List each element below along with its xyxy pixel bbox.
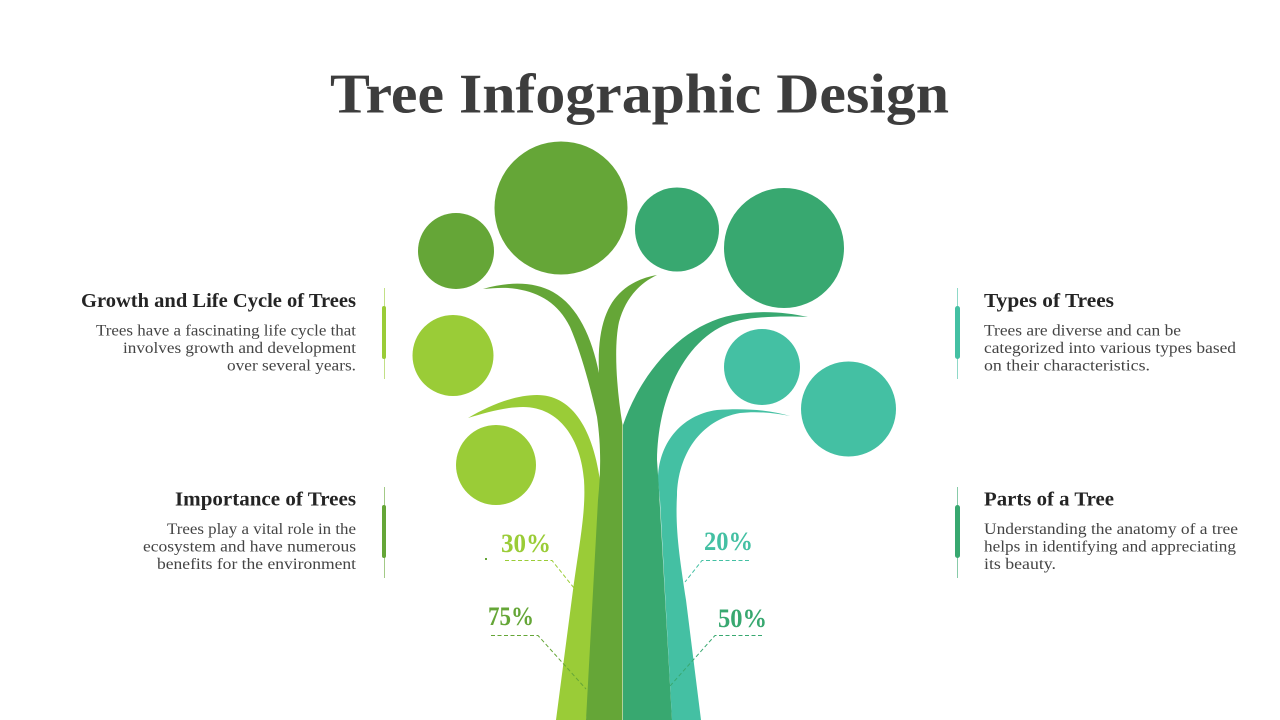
circle: large dark green [494, 142, 628, 274]
marker [955, 288, 960, 379]
text block: helps in identifying and appreciating [984, 538, 1236, 556]
text block: involves growth and development [123, 340, 357, 357]
heading: Parts of a Tree [984, 488, 1114, 510]
tree illustration [412, 142, 896, 720]
dark green branches [483, 275, 657, 720]
panel: parts of a tree [955, 487, 1238, 578]
text block: its beauty. [984, 556, 1056, 573]
circle: large dark teal [724, 188, 844, 308]
circle: small dark green [418, 213, 494, 289]
text block: ecosystem and have numerous [143, 538, 356, 556]
callout: 20% [685, 527, 753, 582]
heading: Types of Trees [984, 290, 1114, 312]
circle: small dark teal [635, 188, 719, 272]
text block: Trees play a vital role in the [167, 521, 356, 538]
callout: 50% [670, 604, 767, 686]
circle: lower light green [456, 425, 536, 505]
dark teal branch [623, 312, 808, 720]
panel: importance of trees [143, 487, 386, 578]
marker [382, 487, 386, 578]
text block [984, 521, 1238, 573]
circle: upper light green [412, 315, 494, 396]
title: Tree Infographic Design [330, 64, 949, 126]
callout: 50%: 50% [718, 604, 767, 633]
text block [143, 521, 357, 573]
light teal branch [658, 409, 790, 720]
marker [955, 487, 960, 578]
callout: 20%: 20% [704, 527, 753, 556]
callout: 30% [501, 529, 582, 598]
panel: types of trees [955, 288, 1236, 379]
circle: small light teal [724, 329, 800, 405]
text block: categorized into various types based [984, 340, 1236, 357]
text block [96, 322, 357, 374]
circle: large light teal [801, 362, 896, 456]
heading: Importance of Trees [175, 488, 356, 510]
text block [984, 322, 1236, 374]
small stray dot [485, 558, 487, 560]
text block: benefits for the environment [157, 556, 357, 573]
callout: 75% [488, 602, 586, 689]
marker [382, 288, 386, 379]
callout: 30%: 30% [501, 529, 551, 558]
text block: on their characteristics. [984, 358, 1150, 374]
panel: growth and life cycle [81, 288, 386, 379]
text block: over several years. [227, 358, 356, 374]
callout: 75%: 75% [488, 602, 534, 631]
text block: Understanding the anatomy of a tree [984, 521, 1238, 538]
text block: Trees are diverse and can be [984, 322, 1181, 340]
light green branch [468, 395, 600, 720]
heading: Growth and Life Cycle of Trees [81, 290, 356, 312]
text block: Trees have a fascinating life cycle that [96, 322, 357, 340]
